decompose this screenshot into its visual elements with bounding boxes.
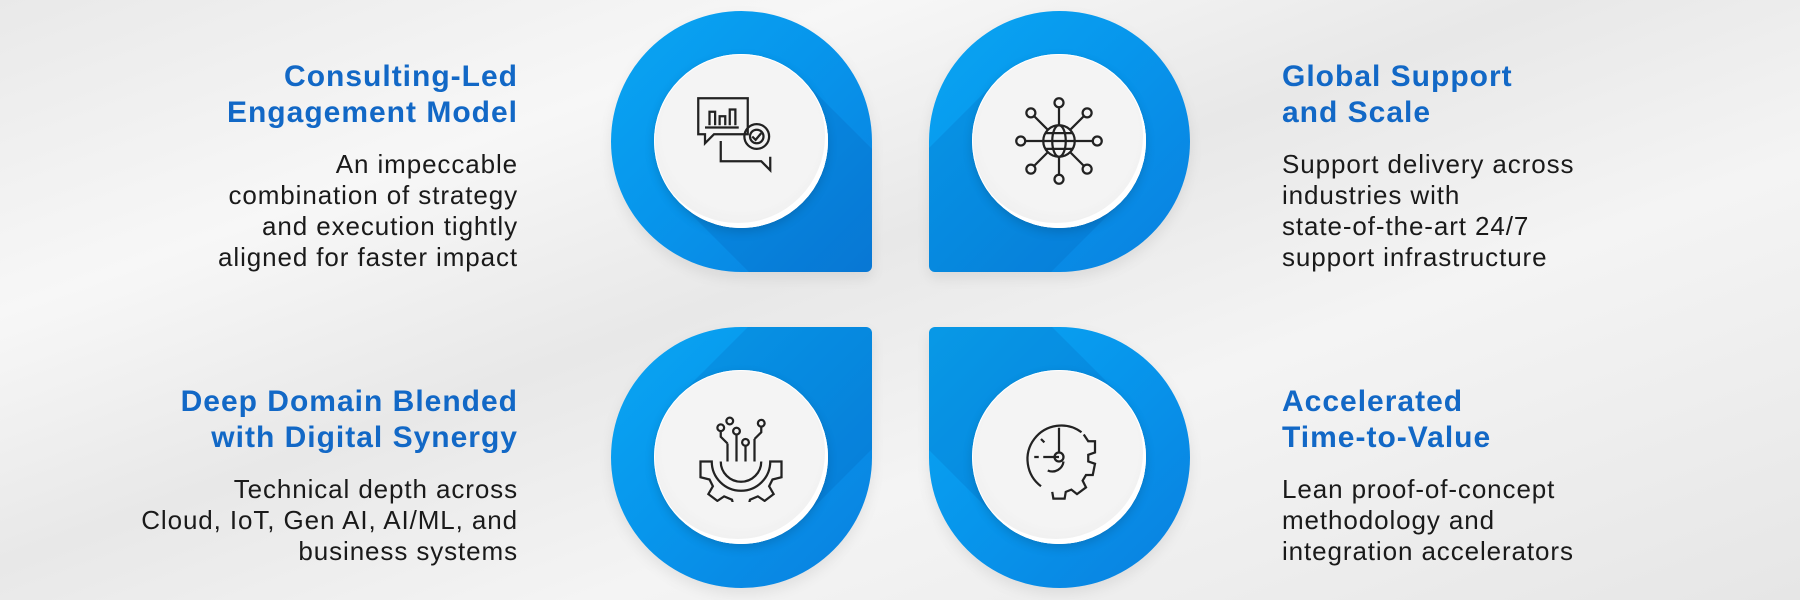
text: global support (1282, 60, 1574, 272)
panel: bottom-left blob (611, 327, 872, 588)
text: consulting-led: aligned for faster impact (218, 242, 518, 272)
text: accelerated: Time-to-Value (1282, 421, 1491, 454)
icon: chart with gear (654, 54, 828, 228)
panel: top-left blob (611, 11, 872, 272)
text: deep domain: with Digital Synergy (211, 421, 518, 454)
text: accelerated (1282, 385, 1574, 566)
panel: top-right blob (929, 11, 1190, 272)
text: global support: industries with (1282, 180, 1460, 210)
text: consulting-led: Engagement Model (227, 96, 518, 129)
text: consulting-led: Consulting-Led (284, 60, 518, 93)
text: accelerated: methodology and (1282, 505, 1495, 535)
text: deep domain: Technical depth across (234, 474, 518, 504)
text: accelerated: integration accelerators (1282, 536, 1574, 566)
icon: clock gear (972, 370, 1146, 544)
text: accelerated: Lean proof-of-concept (1282, 474, 1555, 504)
text: deep domain: Cloud, IoT, Gen AI, AI/ML, and (141, 505, 518, 535)
text: deep domain: business systems (298, 536, 518, 566)
panel: bottom-right blob (929, 327, 1190, 588)
text: global support: state-of-the-art 24/7 (1282, 211, 1529, 241)
text: consulting-led: and execution tightly (262, 211, 518, 241)
text: consulting-led: combination of strategy (228, 180, 518, 210)
text: global support: and Scale (1282, 96, 1431, 129)
text: deep domain (141, 385, 518, 566)
text: deep domain: Deep Domain Blended (181, 385, 518, 418)
text: consulting-led: An impeccable (336, 149, 518, 179)
text: accelerated: Accelerated (1282, 385, 1463, 418)
text: global support: Global Support (1282, 60, 1513, 93)
text: consulting-led (218, 60, 518, 272)
icon: gear with circuits (654, 370, 828, 544)
icon: globe network (972, 54, 1146, 228)
text: global support: support infrastructure (1282, 242, 1547, 272)
text: global support: Support delivery across (1282, 149, 1574, 179)
